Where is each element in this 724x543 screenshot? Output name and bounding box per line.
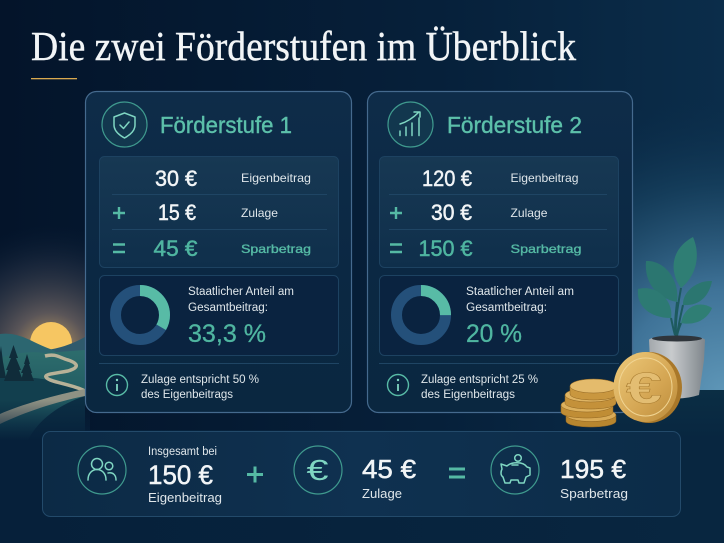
icon: euro: € xyxy=(306,455,328,487)
icon: river xyxy=(0,355,85,424)
donut box: Gesamtbeitrag: xyxy=(466,302,547,314)
calculation table: 120 € xyxy=(422,166,472,191)
donut box xyxy=(100,276,338,356)
icon: people xyxy=(78,446,126,494)
amount: Eigenbeitrag: Insgesamt bei xyxy=(148,446,217,458)
donut box: 20 % xyxy=(466,320,522,348)
icon: sun xyxy=(30,322,72,364)
landscape: sunset with hills, river and trees xyxy=(0,322,90,441)
heading: Förderstufe 2 xyxy=(447,112,582,138)
info note: des Eigenbeitrags xyxy=(141,389,233,401)
amount: Zulage: 45 € xyxy=(362,454,417,484)
amount: Zulage: Zulage xyxy=(362,487,402,501)
amount: Eigenbeitrag xyxy=(148,446,222,505)
info note: Zulage entspricht 50 % xyxy=(141,374,259,386)
icon: rising chart xyxy=(388,102,433,147)
calculation table: Sparbetrag xyxy=(241,242,311,256)
ground fade xyxy=(0,400,90,441)
calculation table xyxy=(100,156,338,268)
amount: Sparbetrag: Sparbetrag xyxy=(560,487,628,501)
icon: shield xyxy=(102,102,147,147)
calculation table: Eigenbeitrag xyxy=(510,171,578,185)
calculation table: Eigenbeitrag xyxy=(241,171,311,185)
gold coins xyxy=(561,352,682,427)
amount: Eigenbeitrag: 150 € xyxy=(148,460,213,490)
title: Die zwei Förderstufen im Überblick xyxy=(31,23,576,69)
donut box: Staatlicher Anteil am xyxy=(466,286,574,298)
heading: Förderstufe 1 xyxy=(160,112,292,138)
donut chart 20 % xyxy=(396,290,446,340)
panel: Förderstufe 1 xyxy=(86,92,352,412)
calculation table: 45 € xyxy=(154,236,198,261)
amount: Sparbetrag xyxy=(560,454,628,501)
calculation table: Sparbetrag xyxy=(510,242,582,256)
info note: des Eigenbeitrags xyxy=(421,389,515,401)
calculation table: 30 € xyxy=(431,200,472,225)
coin stack xyxy=(561,379,617,427)
icon: pine trees xyxy=(0,345,34,381)
calculation table: Zulage xyxy=(510,206,548,220)
big euro coin: € xyxy=(626,364,662,413)
info note: Zulage entspricht 25 % xyxy=(421,374,538,386)
plant xyxy=(638,237,712,398)
amount: Eigenbeitrag: Eigenbeitrag xyxy=(148,490,222,505)
donut box xyxy=(380,276,618,356)
info note xyxy=(106,374,259,401)
donut box: 33,3 % xyxy=(188,320,266,348)
amount: Zulage xyxy=(362,454,417,501)
panel: Förderstufe 2 xyxy=(368,92,632,412)
donut box: Staatlicher Anteil am xyxy=(188,286,294,298)
icon: piggy bank xyxy=(491,446,539,494)
calculation table: 150 € xyxy=(418,236,472,261)
calculation table xyxy=(380,156,618,268)
calculation table: Zulage xyxy=(241,206,278,220)
calculation table: 30 € xyxy=(155,166,197,191)
leaves xyxy=(674,237,697,288)
icon: euro xyxy=(294,446,342,494)
amount: Sparbetrag: 195 € xyxy=(560,454,627,484)
info note xyxy=(388,374,538,401)
plus sign xyxy=(247,466,263,482)
stems xyxy=(671,288,683,338)
donut box: Gesamtbeitrag: xyxy=(188,302,268,314)
donut chart 33,3 % xyxy=(116,290,164,340)
pot xyxy=(649,336,705,398)
panel: total summary xyxy=(42,432,680,516)
calculation table: 15 € xyxy=(158,200,196,225)
equals sign xyxy=(449,469,465,477)
